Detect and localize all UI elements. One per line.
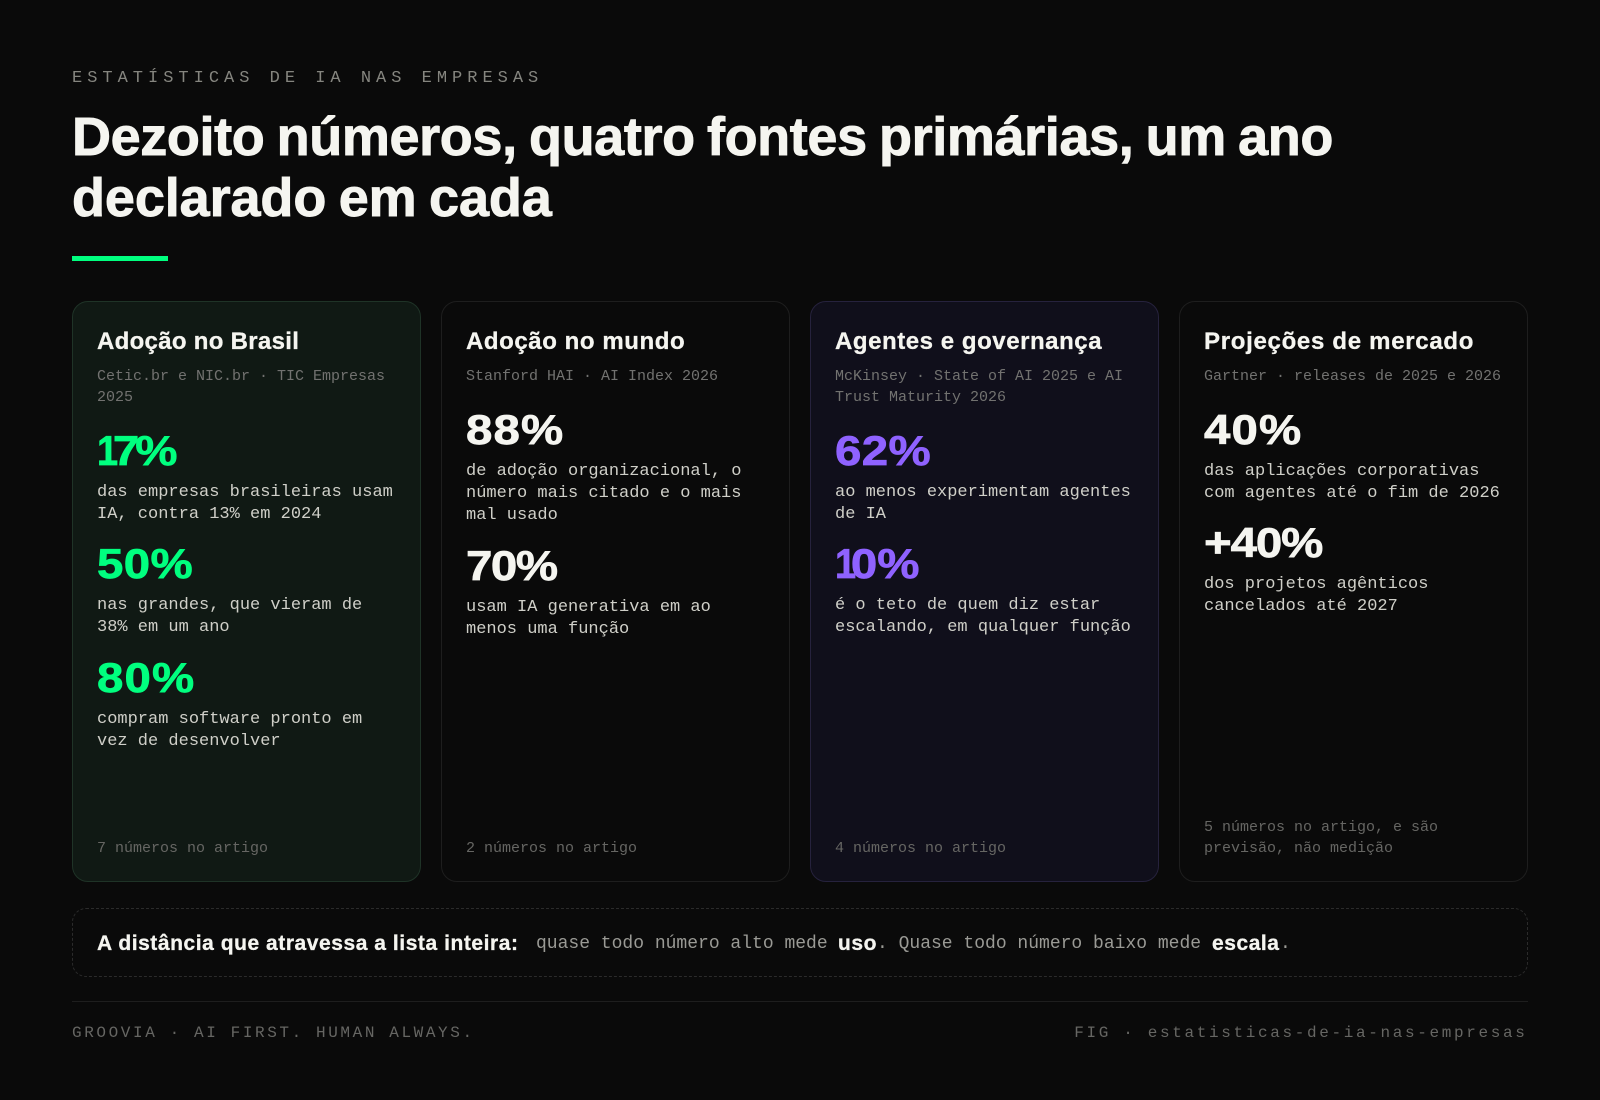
emphasis: uso: uso bbox=[838, 932, 877, 955]
description: mal usado bbox=[466, 506, 558, 525]
callout bbox=[72, 908, 1528, 977]
description: dos projetos agênticos bbox=[1204, 575, 1428, 594]
description: IA, contra 13% em 2024 bbox=[97, 505, 321, 524]
emphasis: escala: escala bbox=[1212, 932, 1280, 955]
number: 80% bbox=[97, 654, 195, 701]
description bbox=[1204, 575, 1428, 616]
number: 7% bbox=[113, 427, 177, 474]
callout end: . bbox=[1280, 934, 1291, 954]
description bbox=[835, 596, 1131, 637]
count note: 4 números no artigo bbox=[835, 840, 1006, 857]
footer right: FIG · estatisticas-de-ia-nas-empresas bbox=[1074, 1024, 1528, 1042]
stat: 10% bbox=[835, 540, 1131, 637]
description: é o teto de quem diz estar bbox=[835, 596, 1100, 615]
stat: 70% bbox=[466, 542, 711, 639]
source: McKinsey · State of AI 2025 e AI bbox=[835, 368, 1123, 385]
footer left: GROOVIA · AI FIRST. HUMAN ALWAYS. bbox=[72, 1024, 475, 1042]
count note: 5 números no artigo, e são bbox=[1204, 819, 1438, 836]
source: Cetic.br e NIC.br · TIC Empresas bbox=[97, 368, 385, 385]
stat: +40% bbox=[1204, 519, 1428, 616]
title: Dezoito números, quatro fontes primárias, um ano bbox=[72, 106, 1333, 166]
count note bbox=[1204, 819, 1438, 857]
callout lead: A distância que atravessa a lista inteira: bbox=[97, 932, 518, 955]
stat: 17% bbox=[97, 427, 393, 524]
description: das aplicações corporativas bbox=[1204, 462, 1479, 481]
source bbox=[97, 368, 385, 406]
description bbox=[1204, 462, 1500, 503]
source: 2025 bbox=[97, 389, 133, 406]
count note: previsão, não medição bbox=[1204, 840, 1393, 857]
count note: 2 números no artigo bbox=[466, 840, 637, 857]
number: 50% bbox=[97, 540, 193, 587]
source: Gartner · releases de 2025 e 2026 bbox=[1204, 368, 1501, 385]
description bbox=[97, 710, 362, 751]
callout text: quase todo número alto mede bbox=[536, 934, 828, 954]
panel heading: Agentes e governança bbox=[835, 328, 1102, 355]
eyebrow: ESTATÍSTICAS DE IA NAS EMPRESAS bbox=[72, 69, 543, 88]
description: ao menos experimentam agentes bbox=[835, 483, 1131, 502]
panel: projeções de mercado bbox=[1179, 301, 1528, 882]
description: vez de desenvolver bbox=[97, 732, 281, 751]
title: declarado em cada bbox=[72, 168, 552, 228]
panel heading: Projeções de mercado bbox=[1204, 328, 1474, 355]
description: número mais citado e o mais bbox=[466, 484, 741, 503]
number: 0% bbox=[851, 540, 919, 587]
source bbox=[835, 368, 1123, 406]
description bbox=[97, 596, 362, 637]
description: escalando, em qualquer função bbox=[835, 618, 1131, 637]
panel: agentes e governança bbox=[810, 301, 1159, 882]
description: cancelados até 2027 bbox=[1204, 597, 1398, 616]
panel heading: Adoção no mundo bbox=[466, 328, 685, 355]
count note: 7 números no artigo bbox=[97, 840, 268, 857]
title bbox=[72, 106, 1333, 228]
number: 1 bbox=[835, 540, 856, 587]
description bbox=[466, 598, 711, 639]
number: 40% bbox=[1204, 406, 1302, 453]
number: 1 bbox=[97, 427, 118, 474]
panel: adoção no mundo bbox=[441, 301, 790, 882]
description: menos uma função bbox=[466, 620, 629, 639]
description: compram software pronto em bbox=[97, 710, 362, 729]
stat: 88% bbox=[466, 406, 741, 525]
description: usam IA generativa em ao bbox=[466, 598, 711, 617]
description: de adoção organizacional, o bbox=[466, 462, 741, 481]
description bbox=[97, 483, 393, 524]
description: 38% em um ano bbox=[97, 618, 230, 637]
stat: 80% bbox=[97, 654, 362, 751]
description bbox=[466, 462, 741, 525]
description: com agentes até o fim de 2026 bbox=[1204, 484, 1500, 503]
stat: 50% bbox=[97, 540, 362, 637]
callout text: . Quase todo número baixo mede bbox=[877, 934, 1201, 954]
panel: adoção no Brasil bbox=[72, 301, 421, 882]
source: Trust Maturity 2026 bbox=[835, 389, 1006, 406]
description: das empresas brasileiras usam bbox=[97, 483, 393, 502]
stat: 62% bbox=[835, 427, 1131, 524]
accent rule bbox=[72, 256, 168, 261]
panel heading: Adoção no Brasil bbox=[97, 328, 299, 355]
number: 62% bbox=[835, 427, 931, 474]
description bbox=[835, 483, 1131, 524]
number: +40% bbox=[1204, 519, 1322, 566]
stat: 40% bbox=[1204, 406, 1500, 503]
number: 88% bbox=[466, 406, 564, 453]
description: nas grandes, que vieram de bbox=[97, 596, 362, 615]
description: de IA bbox=[835, 505, 886, 524]
source: Stanford HAI · AI Index 2026 bbox=[466, 368, 718, 385]
number: 70% bbox=[466, 542, 557, 589]
